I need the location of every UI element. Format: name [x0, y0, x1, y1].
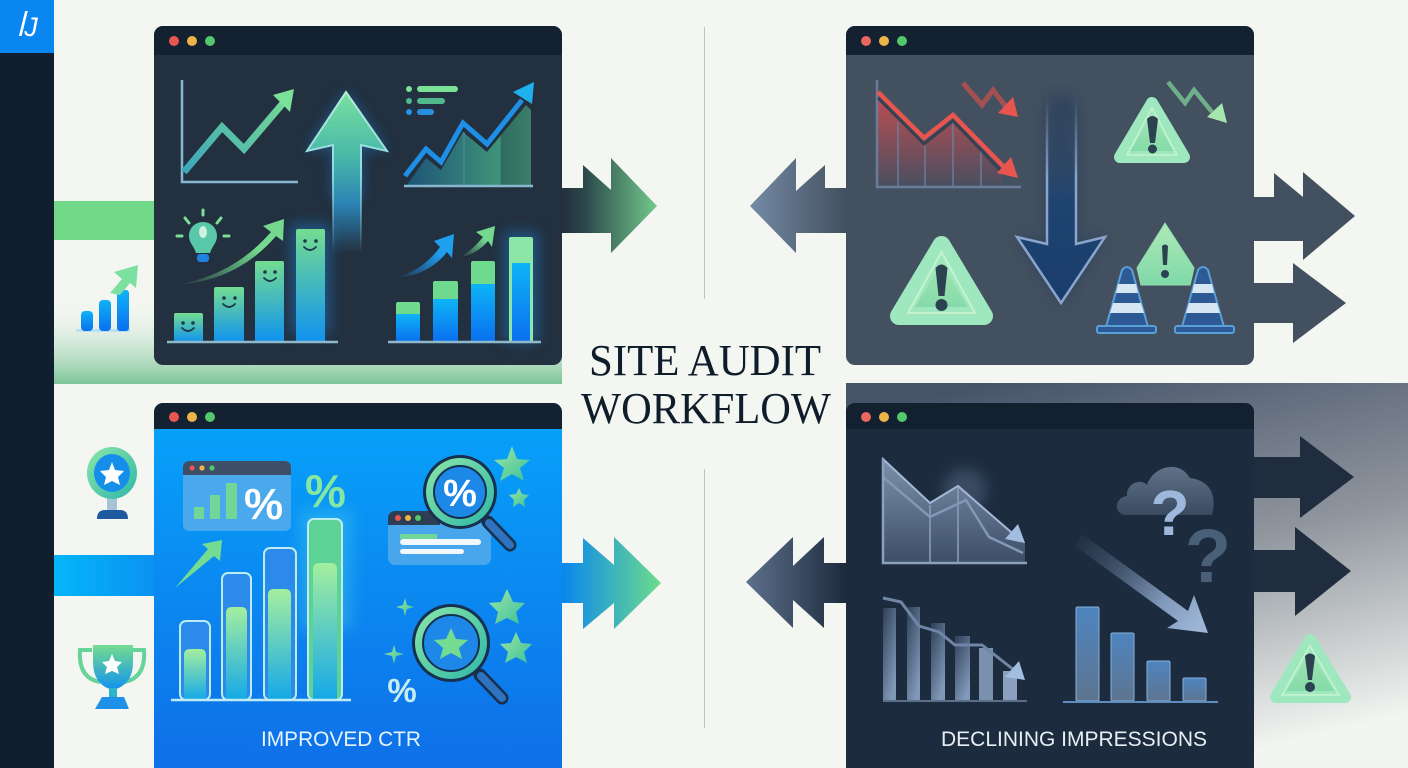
arrow: right lower from panel 4 — [1254, 527, 1351, 616]
logo — [0, 0, 54, 53]
icon: lightbulb — [177, 210, 229, 262]
legend list — [406, 86, 458, 115]
arrow: right lower from panel 2 — [1254, 263, 1346, 343]
arrow: right upper from panel 2 — [1254, 172, 1355, 260]
growth arrow — [175, 540, 222, 588]
icon: cloud with question marks: ? — [1185, 514, 1231, 599]
arrow: left from panel 4 — [746, 537, 846, 628]
small green arrow — [1168, 82, 1227, 123]
background band: lower left green — [54, 300, 562, 384]
panel: warnings dashboard — [846, 26, 1254, 365]
label: improved CTR: IMPROVED CTR — [261, 728, 421, 751]
icon: magnifier with star — [412, 604, 502, 698]
sidebar — [0, 0, 54, 768]
arrow: green right from panel 1 — [562, 158, 657, 253]
mini window with bars: % — [244, 480, 283, 529]
diagonal down arrow — [1075, 534, 1208, 633]
icon: medal with star — [87, 447, 137, 519]
logo: ꟾJ — [16, 10, 38, 42]
icon: warning triangle top — [1120, 103, 1184, 157]
panel: improving performance dashboard — [154, 26, 562, 365]
label: declining impressions: DECLINING IMPRESSIONS — [941, 728, 1207, 751]
icon: magnifier with percent: % — [443, 473, 477, 515]
icon: cloud with question marks: ? — [1150, 477, 1190, 549]
mini window with bars — [183, 461, 291, 531]
icon: stars and sparkles lower — [384, 589, 532, 664]
outlined bars — [171, 510, 352, 700]
icon: warning triangle on gray — [1276, 640, 1345, 697]
blue connector band — [54, 555, 154, 596]
arrow: right upper from panel 4 — [1254, 436, 1354, 518]
green connector band — [54, 201, 154, 240]
icon: magnifier with percent — [423, 455, 510, 545]
blue falling bars — [1063, 607, 1218, 702]
panel: improved CTR dashboard — [154, 403, 562, 768]
smiley bars — [167, 224, 338, 342]
icon: warning triangle large — [899, 245, 984, 316]
center divider top — [704, 27, 706, 299]
area chart rising — [404, 82, 534, 186]
icon: cloud with question marks — [1117, 467, 1231, 599]
title: SITE AUDIT — [589, 336, 821, 385]
red declining chart — [877, 80, 1021, 187]
big up arrow — [307, 92, 387, 253]
faded bars chart — [883, 598, 1027, 701]
percent small: % — [387, 672, 417, 709]
stacked bars — [388, 232, 541, 342]
icon: trophy with star — [80, 645, 144, 709]
mini result window — [388, 511, 491, 565]
curved arrows — [398, 226, 495, 277]
icon: stars upper — [494, 446, 530, 507]
declining area chart — [883, 458, 1027, 563]
line chart rising — [182, 80, 298, 182]
background block: lower right gray — [846, 383, 1408, 768]
curved arrow green — [176, 219, 284, 285]
arrow: left from panel 2 — [750, 158, 846, 253]
icon: small growth bars — [76, 265, 138, 332]
icon: warning pentagon — [1137, 223, 1194, 285]
arrow: right from panel 3 — [562, 537, 661, 629]
title: WORKFLOW — [581, 384, 831, 433]
panel: declining impressions dashboard — [846, 403, 1254, 768]
big down arrow — [1017, 98, 1105, 303]
percent green: % — [305, 465, 346, 517]
icon: traffic cones — [1097, 267, 1234, 333]
title — [581, 336, 831, 433]
small red arrow — [963, 83, 1018, 117]
